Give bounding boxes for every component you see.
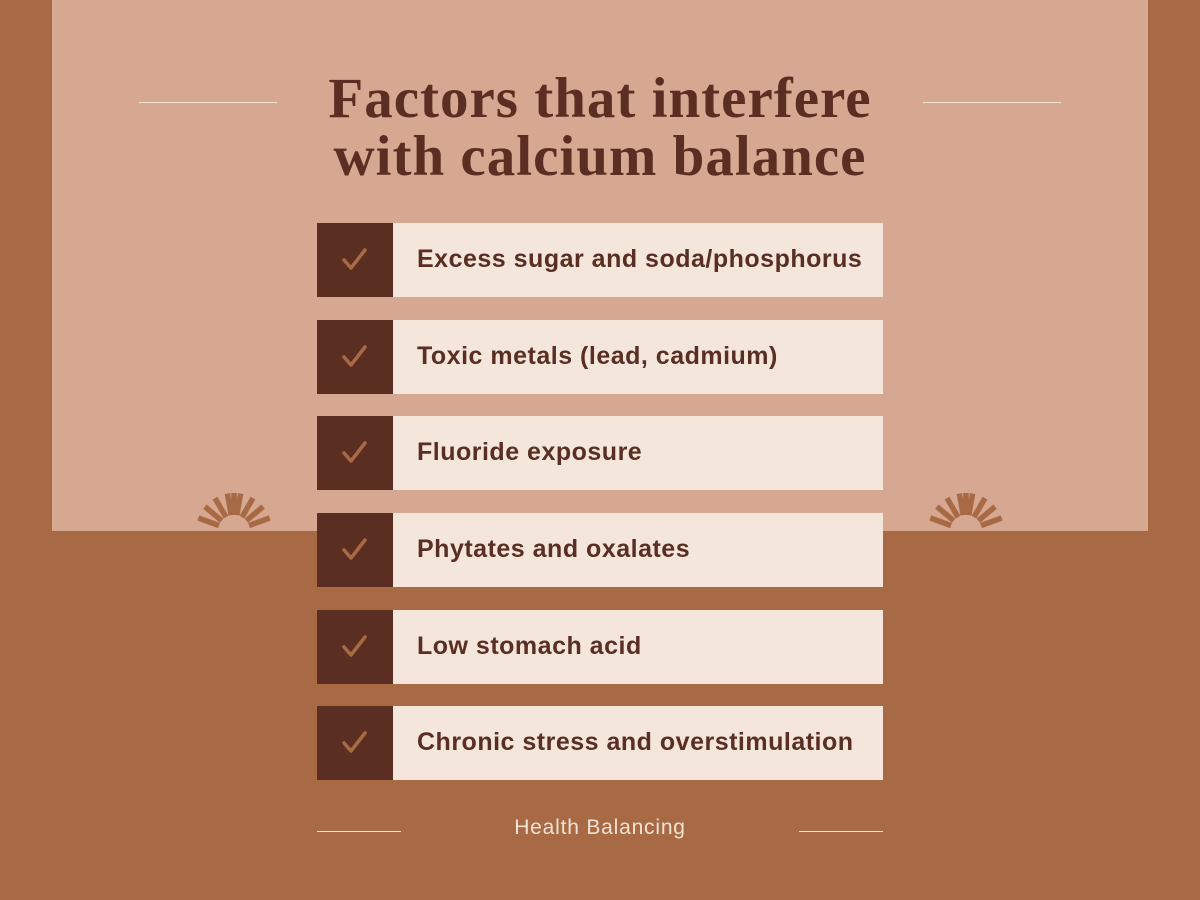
title: Factors that interfere xyxy=(328,67,872,130)
list item 3: Fluoride exposure xyxy=(417,438,642,466)
list item 1: Excess sugar and soda/phosphorus xyxy=(417,245,862,273)
title decorative line left xyxy=(139,102,277,103)
title xyxy=(328,67,872,188)
title: with calcium balance xyxy=(334,125,866,188)
list item 6 xyxy=(317,706,883,780)
list item 2 xyxy=(317,320,883,394)
icon: sunburst right xyxy=(930,493,1002,528)
list item 2: Toxic metals (lead, cadmium) xyxy=(417,342,778,370)
list item 1 xyxy=(317,223,883,297)
top background panel xyxy=(52,0,1148,531)
list item 5 xyxy=(317,610,883,684)
list item 5: Low stomach acid xyxy=(417,632,642,660)
title decorative line right xyxy=(923,102,1061,103)
list item 4: Phytates and oxalates xyxy=(417,535,690,563)
footer text: Health Balancing xyxy=(514,816,686,839)
list item 4 xyxy=(317,513,883,587)
icon: sunburst left xyxy=(198,493,270,528)
list item 6: Chronic stress and overstimulation xyxy=(417,728,854,756)
list item 3 xyxy=(317,416,883,490)
footer line left xyxy=(317,831,401,832)
footer line right xyxy=(799,831,883,832)
